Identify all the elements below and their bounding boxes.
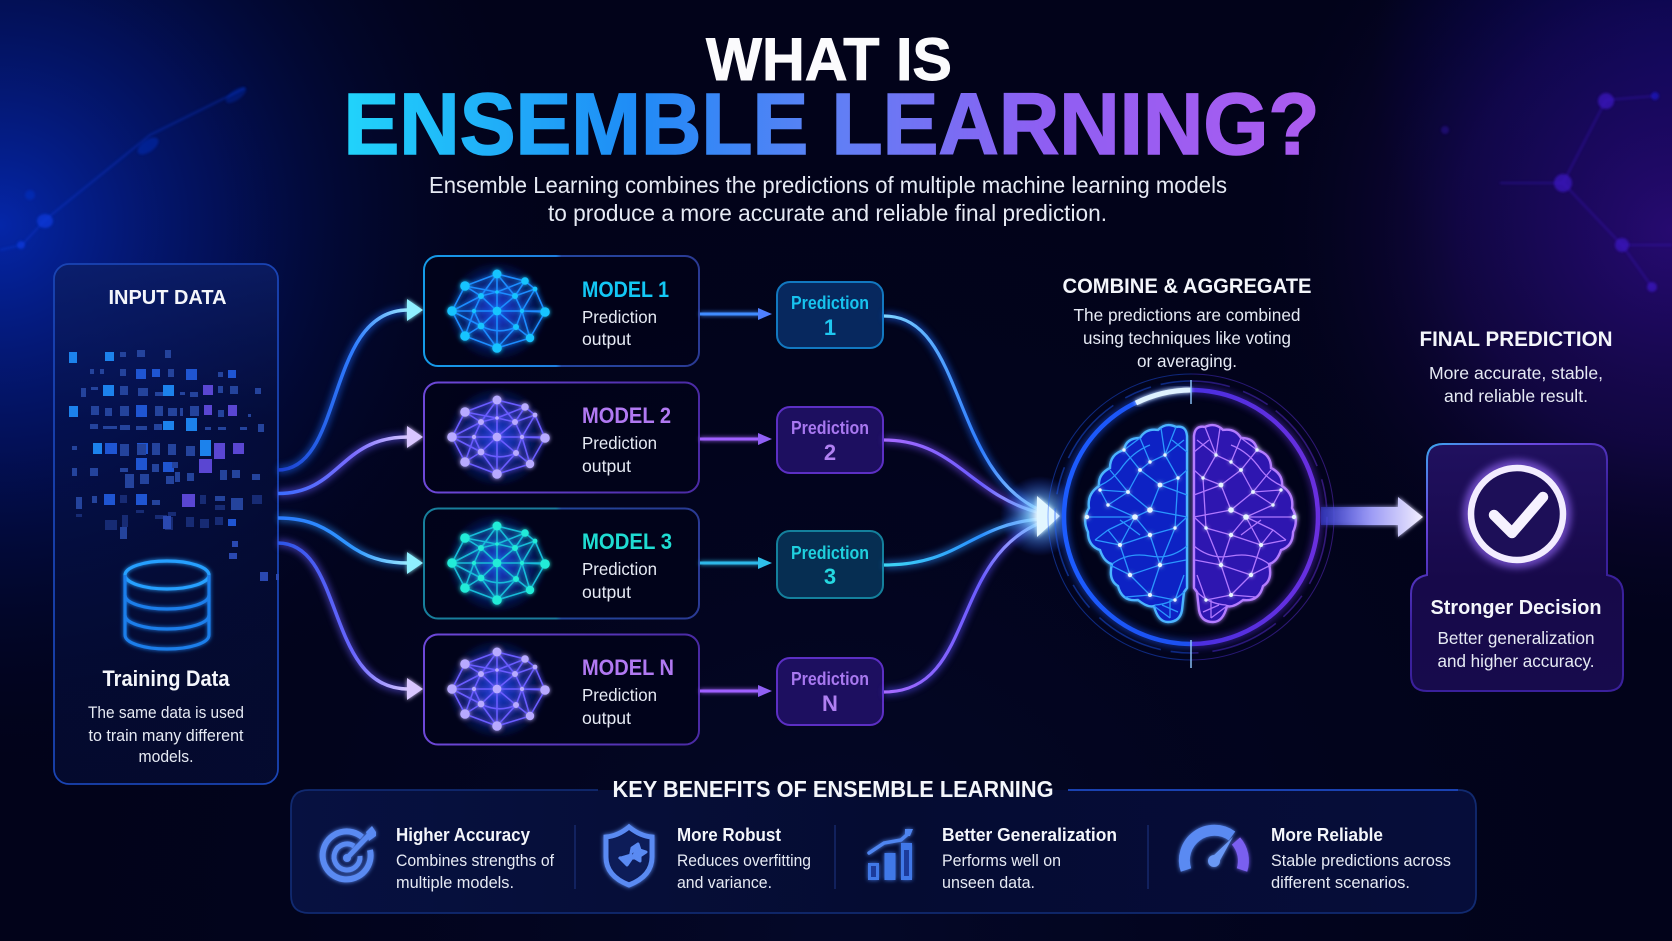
text: more reliable	[1271, 824, 1451, 892]
subtitle	[429, 172, 1227, 226]
icon: gauge	[1184, 830, 1243, 870]
heading: key benefits: KEY BENEFITS OF ENSEMBLE LEARNING	[612, 776, 1054, 802]
prediction 3: Prediction	[791, 543, 869, 563]
icon: database	[125, 561, 209, 649]
heading: combine and aggregate: COMBINE & AGGREGATE	[1062, 274, 1312, 298]
text: final description	[1429, 363, 1603, 406]
arrows: data to models	[278, 299, 423, 700]
prediction 1	[777, 282, 883, 348]
text: stronger description: and higher accuracy.	[1438, 651, 1594, 671]
text: combine description: using techniques like voting	[1083, 328, 1291, 348]
text: training description	[88, 703, 244, 766]
text: output 2	[582, 433, 657, 476]
prediction 3: 3	[824, 564, 836, 589]
text: model N: MODEL N	[582, 655, 674, 680]
brain: left hemisphere	[1085, 425, 1187, 622]
text: higher accuracy: Higher Accuracy	[396, 824, 531, 845]
prediction 1: 1	[824, 315, 836, 340]
text: stronger description: Better generalization	[1438, 628, 1594, 648]
prediction N: N	[822, 691, 838, 716]
prediction 1: Prediction	[791, 293, 869, 313]
icon: check circle	[1470, 467, 1564, 561]
text: output 1: output	[582, 329, 631, 349]
text: output 1: Prediction	[582, 307, 657, 327]
text: model 2: MODEL 2	[582, 403, 671, 428]
icon: network N	[447, 639, 550, 739]
subtitle: Ensemble Learning combines the predictions of multiple machine learning models	[429, 172, 1227, 198]
text: output N	[582, 685, 657, 728]
arrows: models to predictions	[700, 308, 772, 697]
text: better generalization: Performs well on	[942, 852, 1061, 870]
heading: input data: INPUT DATA	[108, 286, 227, 309]
panel: model N	[424, 634, 699, 744]
text: more robust	[677, 824, 811, 892]
panel: model 1	[424, 256, 699, 366]
subtitle: to produce a more accurate and reliable final prediction.	[548, 200, 1107, 226]
panel: model 3	[424, 508, 699, 618]
text: final description: and reliable result.	[1444, 386, 1588, 406]
text: more robust: More Robust	[677, 824, 781, 845]
text: training description: to train many different	[88, 726, 244, 745]
text: output 3: Prediction	[582, 559, 657, 579]
text: more reliable: different scenarios.	[1271, 874, 1410, 892]
text: training description: The same data is used	[88, 703, 244, 722]
text: training description: models.	[138, 747, 194, 766]
arrows: predictions to combine	[884, 316, 1080, 692]
icon: shield	[606, 827, 652, 885]
prediction 3	[777, 531, 883, 598]
text: output 2: Prediction	[582, 433, 657, 453]
panel: input data	[54, 264, 279, 784]
prediction 2: 2	[824, 440, 836, 465]
text: final description: More accurate, stable,	[1429, 363, 1603, 383]
text: more robust: Reduces overfitting	[677, 852, 811, 870]
icon: network 1	[447, 261, 550, 361]
brain: right hemisphere	[1194, 425, 1296, 622]
prediction 2	[777, 407, 883, 473]
icon: network 2	[447, 387, 550, 487]
text: stronger decision: Stronger Decision	[1430, 596, 1602, 619]
text: more reliable: Stable predictions across	[1271, 852, 1451, 870]
icon: network 3	[447, 513, 550, 613]
brain in ring	[1048, 374, 1334, 668]
text: combine description: The predictions are combined	[1074, 305, 1300, 325]
text: higher accuracy: Combines strengths of	[396, 852, 554, 870]
text: better generalization	[942, 824, 1117, 892]
heading: final prediction: FINAL PREDICTION	[1420, 327, 1612, 351]
text: more robust: and variance.	[677, 874, 772, 892]
text: stronger description	[1438, 628, 1594, 671]
title: ENSEMBLE LEARNING?	[344, 76, 1320, 173]
panel: key benefits	[291, 776, 1476, 913]
icon: bar chart	[868, 829, 913, 880]
panel: final card	[1411, 444, 1623, 691]
panel: model 2	[424, 382, 699, 492]
text: higher accuracy	[396, 824, 554, 892]
title	[344, 26, 1320, 173]
prediction N: Prediction	[791, 669, 869, 689]
text: output 3	[582, 559, 657, 602]
icon: target	[323, 826, 376, 879]
text: better generalization: Better Generalization	[942, 824, 1117, 845]
text: output 3: output	[582, 582, 631, 602]
text: model 1: MODEL 1	[582, 277, 669, 302]
text: output 1	[582, 307, 657, 349]
text: combine description	[1074, 305, 1300, 371]
text: output N: output	[582, 708, 631, 728]
data points grid	[69, 350, 279, 581]
text: output 2: output	[582, 456, 631, 476]
text: more reliable: More Reliable	[1271, 824, 1383, 845]
prediction 2: Prediction	[791, 418, 869, 438]
text: model 3: MODEL 3	[582, 529, 672, 554]
text: training data: Training Data	[102, 666, 230, 691]
text: higher accuracy: multiple models.	[396, 874, 514, 892]
arrow: brain to final	[1321, 497, 1423, 537]
title: WHAT IS	[706, 26, 952, 93]
text: better generalization: unseen data.	[942, 874, 1035, 892]
text: output N: Prediction	[582, 685, 657, 705]
text: combine description: or averaging.	[1137, 351, 1237, 371]
prediction N	[777, 658, 883, 725]
